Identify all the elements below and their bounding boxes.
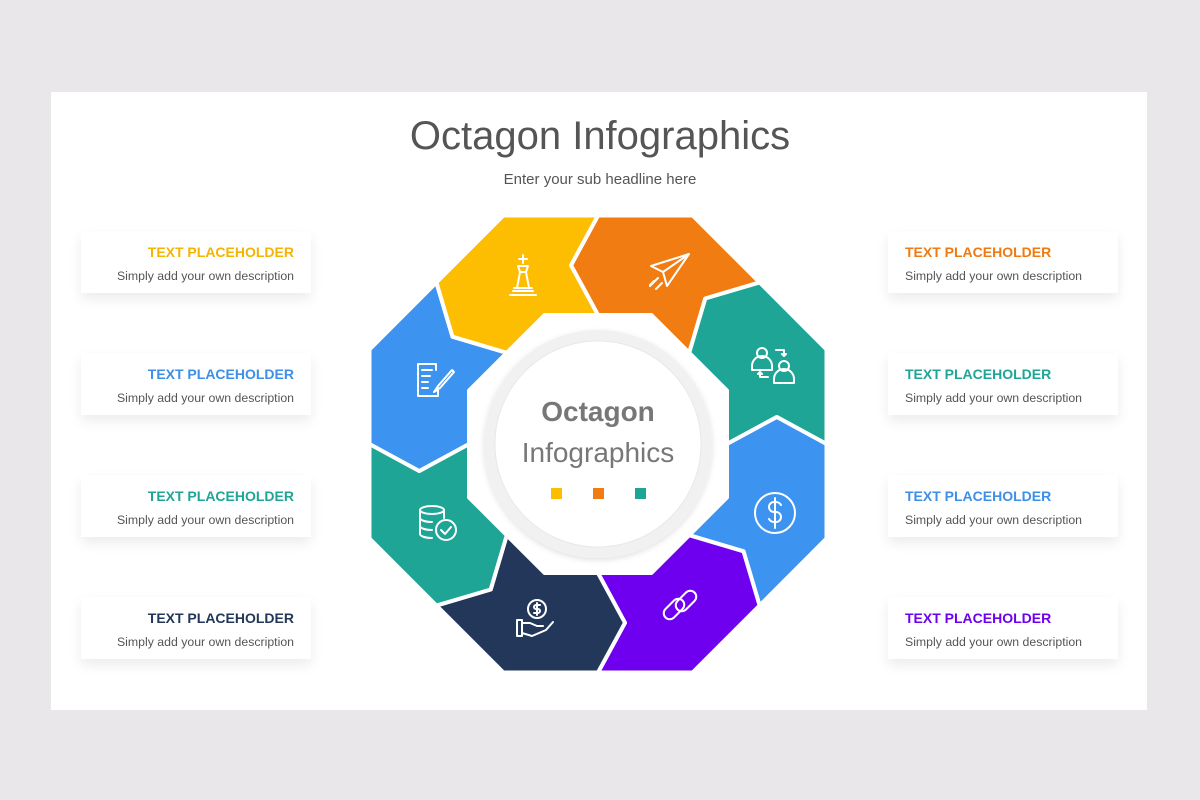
center label (522, 396, 674, 468)
card: right 2: TEXT PLACEHOLDER (905, 366, 1051, 382)
icon: paper plane (650, 254, 689, 289)
card: left 3: TEXT PLACEHOLDER (148, 488, 294, 504)
center label: Octagon (541, 396, 655, 427)
card: left 3: Simply add your own description (117, 513, 294, 527)
center octagon (472, 318, 724, 570)
icon: document pen (418, 364, 454, 396)
icon: chess king (510, 255, 536, 295)
segment: blue right (689, 417, 826, 606)
card: right 1 (888, 231, 1118, 293)
icon: chain link (661, 588, 699, 622)
card: right 3 (888, 475, 1118, 537)
segment: orange (571, 216, 760, 353)
card: right 4: TEXT PLACEHOLDER (905, 610, 1051, 626)
card: left 2 (81, 353, 311, 415)
segment: navy (436, 535, 625, 672)
card: right 3: TEXT PLACEHOLDER (905, 488, 1051, 504)
card: right 1: Simply add your own description (905, 269, 1082, 283)
card: left 4 (81, 597, 311, 659)
card: left 4: Simply add your own description (117, 635, 294, 649)
center label: Infographics (522, 437, 674, 468)
card: right 1: TEXT PLACEHOLDER (905, 244, 1051, 260)
segment: teal right (689, 282, 826, 444)
card: left 1: TEXT PLACEHOLDER (148, 244, 294, 260)
card: right 4 (888, 597, 1118, 659)
center squares (551, 488, 646, 499)
card: right 3: Simply add your own description (905, 513, 1082, 527)
card: right 4: Simply add your own description (905, 635, 1082, 649)
card: left 1 (81, 231, 311, 293)
card: left 2: TEXT PLACEHOLDER (148, 366, 294, 382)
center ring (484, 330, 712, 558)
title: Octagon Infographics (410, 114, 790, 158)
card: left 3 (81, 475, 311, 537)
card: left 1: Simply add your own description (117, 269, 294, 283)
icon: people exchange (752, 348, 794, 383)
subtitle: Enter your sub headline here (504, 171, 696, 188)
icon: hand with coin (517, 600, 553, 636)
segment: purple (598, 535, 760, 672)
card: left 2: Simply add your own description (117, 391, 294, 405)
segment: yellow (436, 216, 598, 353)
card: right 2: Simply add your own description (905, 391, 1082, 405)
segment: blue left (370, 282, 507, 471)
icon: dollar coin (755, 493, 795, 533)
icon: database check (420, 506, 456, 540)
card: left 4: TEXT PLACEHOLDER (148, 610, 294, 626)
card: right 2 (888, 353, 1118, 415)
segment: teal left (370, 444, 507, 606)
